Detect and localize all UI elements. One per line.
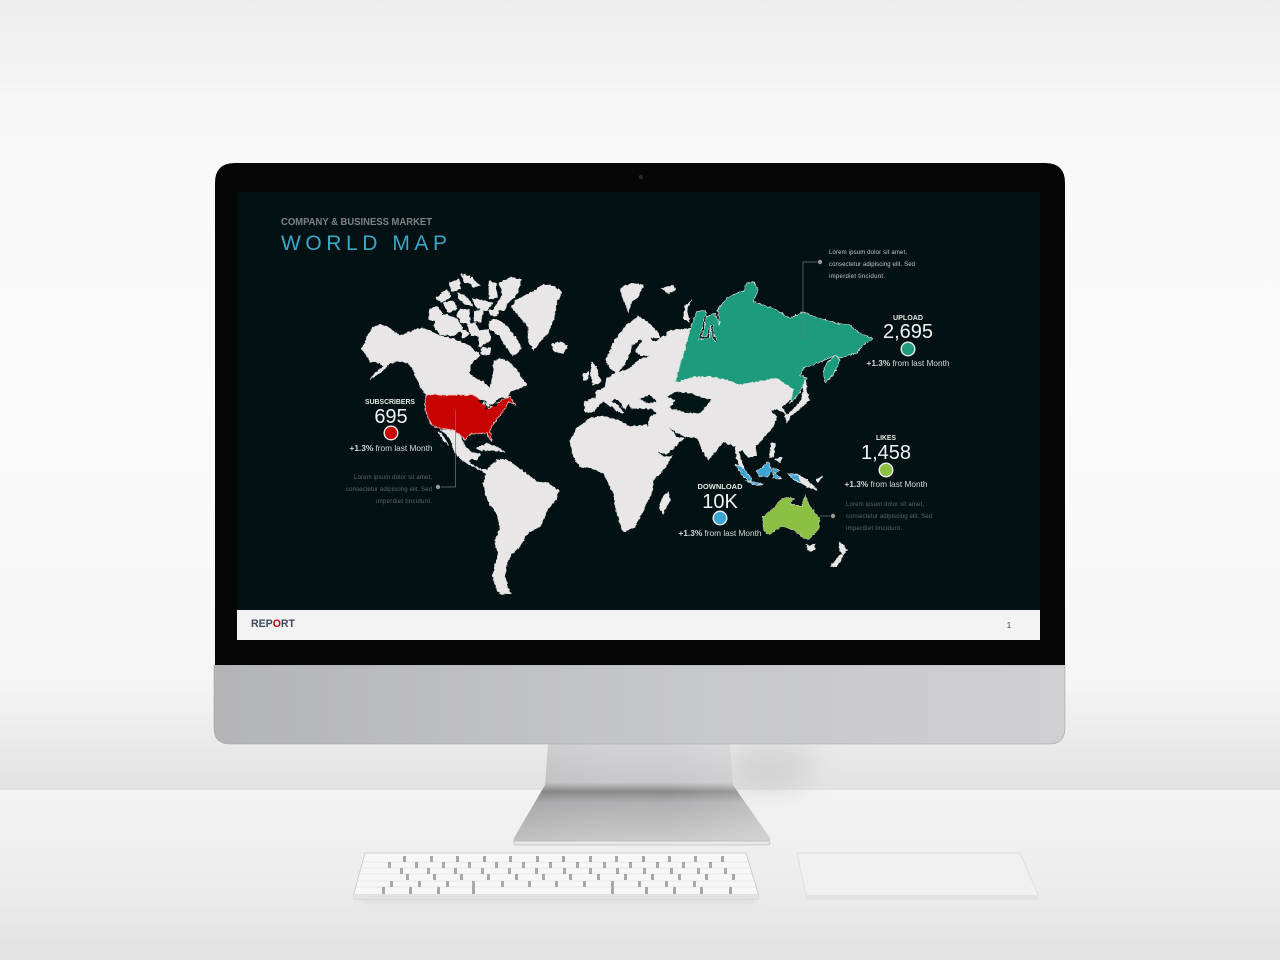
callout: download bbox=[678, 482, 762, 538]
Russia highlighted bbox=[675, 282, 873, 403]
Australia highlighted bbox=[763, 495, 820, 540]
Japan and Sakhalin bbox=[785, 380, 809, 422]
note: likes lorem ipsum bbox=[846, 502, 932, 532]
world map bbox=[362, 275, 873, 594]
Africa bbox=[570, 416, 672, 532]
Britain and Ireland bbox=[583, 362, 601, 385]
note: subscribers lorem ipsum: consectetur adipiscing elit. Sed bbox=[346, 487, 432, 493]
callout: upload: 2,695 bbox=[883, 321, 933, 343]
callout: upload: UPLOAD bbox=[893, 313, 924, 322]
USA highlighted bbox=[425, 395, 515, 442]
callout: likes: 1,458 bbox=[861, 442, 911, 464]
monitor bezel bbox=[215, 163, 1065, 665]
callout: likes bbox=[844, 433, 928, 489]
callout: upload bbox=[866, 313, 950, 368]
stand shadow on wall bbox=[730, 746, 815, 790]
Madagascar bbox=[659, 492, 670, 513]
Eurasia white landmass bbox=[584, 317, 793, 477]
note: upload lorem ipsum: consectetur adipiscing elit. Sed bbox=[829, 262, 915, 268]
background: desk bbox=[0, 790, 1280, 960]
camera bbox=[639, 175, 643, 179]
callout: likes: +1.3% from last Month bbox=[844, 479, 928, 489]
note: upload lorem ipsum bbox=[829, 250, 915, 280]
Greenland bbox=[512, 285, 562, 350]
Iceland bbox=[552, 342, 567, 353]
Kamchatka bbox=[823, 355, 840, 383]
Black Sea bbox=[640, 395, 657, 403]
callout: subscribers: 695 bbox=[374, 406, 408, 428]
note: subscribers lorem ipsum bbox=[346, 475, 432, 505]
footer label: report: REPORT bbox=[251, 618, 295, 630]
note: subscribers lorem ipsum: imperdiet tincidunt. bbox=[376, 499, 432, 505]
callout: download: DOWNLOAD bbox=[698, 482, 743, 491]
callout: subscribers: SUBSCRIBERS bbox=[365, 397, 415, 406]
map: eurasia, africa, oceania bbox=[570, 282, 873, 567]
leader line: upload bbox=[803, 260, 822, 340]
Papua and Philippines bbox=[770, 443, 822, 490]
note: likes lorem ipsum: Lorem ipsum dolor sit amet, bbox=[846, 502, 924, 508]
note: likes lorem ipsum: imperdiet tincidunt. bbox=[846, 526, 902, 532]
footer bar bbox=[237, 610, 1040, 640]
South America bbox=[483, 459, 558, 594]
note: upload lorem ipsum: imperdiet tincidunt. bbox=[829, 274, 885, 280]
Cuba bbox=[477, 443, 505, 452]
leader line: likes bbox=[820, 514, 835, 518]
monitor chin bbox=[214, 665, 1065, 744]
Indonesia bbox=[735, 462, 802, 485]
Arctic islands bbox=[620, 283, 692, 322]
heading: world map: WORLD MAP bbox=[281, 232, 447, 255]
note: likes lorem ipsum: consectetur adipiscing elit. Sed bbox=[846, 514, 932, 520]
callout: upload: +1.3% from last Month bbox=[866, 358, 950, 368]
Mexico and Central America bbox=[438, 430, 488, 473]
Caspian and inland dark bbox=[667, 392, 712, 413]
Great Lakes bbox=[478, 399, 498, 410]
leader line: subscribers bbox=[436, 410, 456, 489]
callout: download: 10K bbox=[702, 491, 738, 513]
Tasmania bbox=[807, 544, 815, 552]
note: subscribers lorem ipsum: Lorem ipsum dolor sit amet, bbox=[354, 475, 432, 481]
note: upload lorem ipsum: Lorem ipsum dolor sit amet, bbox=[829, 250, 907, 256]
callout: likes: LIKES bbox=[876, 433, 896, 442]
screen panel bbox=[237, 192, 1040, 610]
New Zealand bbox=[832, 543, 847, 567]
page number: 1 bbox=[1007, 621, 1012, 630]
keyboard bbox=[354, 853, 758, 899]
Yamal inlet bbox=[700, 317, 717, 342]
callout: subscribers bbox=[350, 397, 433, 453]
callout: download: +1.3% from last Month bbox=[678, 528, 762, 538]
map: americas and arctic bbox=[362, 275, 567, 594]
keyboard shadow bbox=[360, 893, 755, 901]
Canadian arctic islands bbox=[429, 275, 521, 355]
Canada and Alaska bbox=[362, 324, 527, 407]
trackpad bbox=[797, 853, 1038, 899]
callout: subscribers: +1.3% from last Month bbox=[350, 443, 433, 453]
Yamal outline bbox=[700, 317, 717, 342]
heading: company and business market: COMPANY & BUSINESS MARKET bbox=[281, 217, 432, 228]
monitor stand bbox=[514, 744, 770, 845]
